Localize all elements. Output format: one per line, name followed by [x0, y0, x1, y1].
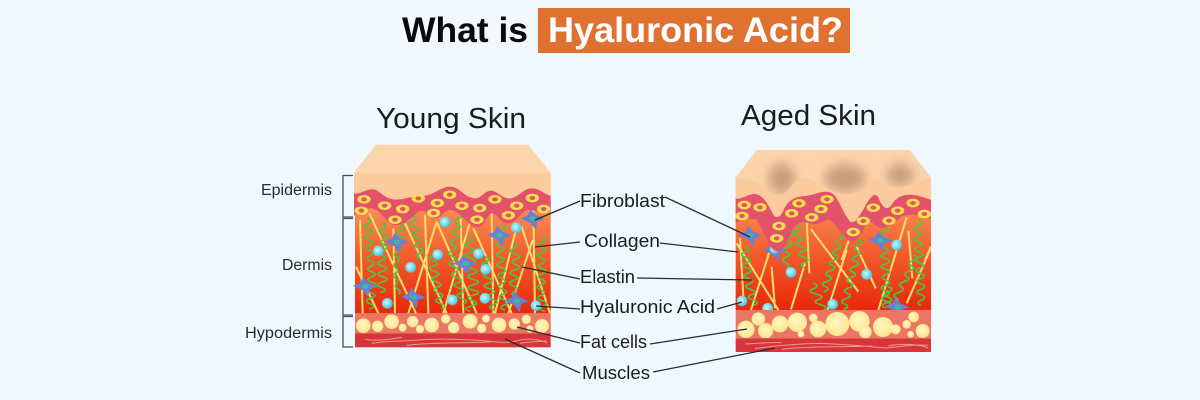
label: fat cells: Fat cells: [580, 332, 647, 352]
hyaluronic acid spheres: [737, 240, 902, 314]
pink cell layer: [354, 187, 551, 227]
label: epidermis: Epidermis: [261, 182, 332, 199]
dermis: [355, 203, 551, 313]
label: elastin: Elastin: [580, 267, 635, 287]
elastin fibers: [741, 220, 925, 310]
hypodermis: [355, 313, 551, 333]
label: hypodermis: Hypodermis: [245, 325, 332, 342]
pink cell layer: [736, 192, 931, 252]
dermis: [736, 198, 931, 310]
layer brackets: [343, 176, 353, 347]
epidermis front: [354, 173, 551, 213]
label: dermis: Dermis: [282, 257, 332, 274]
fat cells: [356, 314, 549, 333]
muscle layer: [736, 338, 931, 352]
leader lines: [505, 197, 775, 373]
fibroblast cells: [353, 209, 545, 312]
heading: young skin: Young Skin: [376, 103, 526, 135]
epidermal cells: [735, 195, 931, 243]
muscle layer: [355, 333, 551, 347]
epidermis front with wrinkled edge: [736, 177, 931, 222]
elastin fibers: [364, 213, 547, 311]
panel: young skin cross-section: [353, 145, 551, 347]
hypodermis: [736, 310, 931, 338]
panel: aged skin cross-section: [735, 150, 931, 352]
title highlight: Hyaluronic Acid?: [548, 11, 843, 50]
label: hyaluronic acid: Hyaluronic Acid: [580, 297, 715, 317]
fat cells: [737, 311, 930, 338]
epidermal cells: [355, 190, 550, 224]
wrinkle shading: [768, 163, 913, 193]
hyaluronic acid spheres: [373, 217, 541, 311]
collagen fibers: [737, 217, 931, 310]
label: muscles: Muscles: [582, 363, 650, 383]
title: [402, 8, 850, 53]
title: What is: [402, 11, 528, 50]
label: fibroblast: Fibroblast: [580, 191, 665, 211]
background panel: [222, 52, 978, 392]
fibroblast cells: [738, 226, 910, 318]
collagen fibers: [356, 210, 550, 313]
label: collagen: Collagen: [584, 231, 660, 251]
heading: aged skin: Aged Skin: [741, 100, 876, 132]
skin surface: [354, 145, 551, 173]
skin surface: [736, 150, 931, 200]
